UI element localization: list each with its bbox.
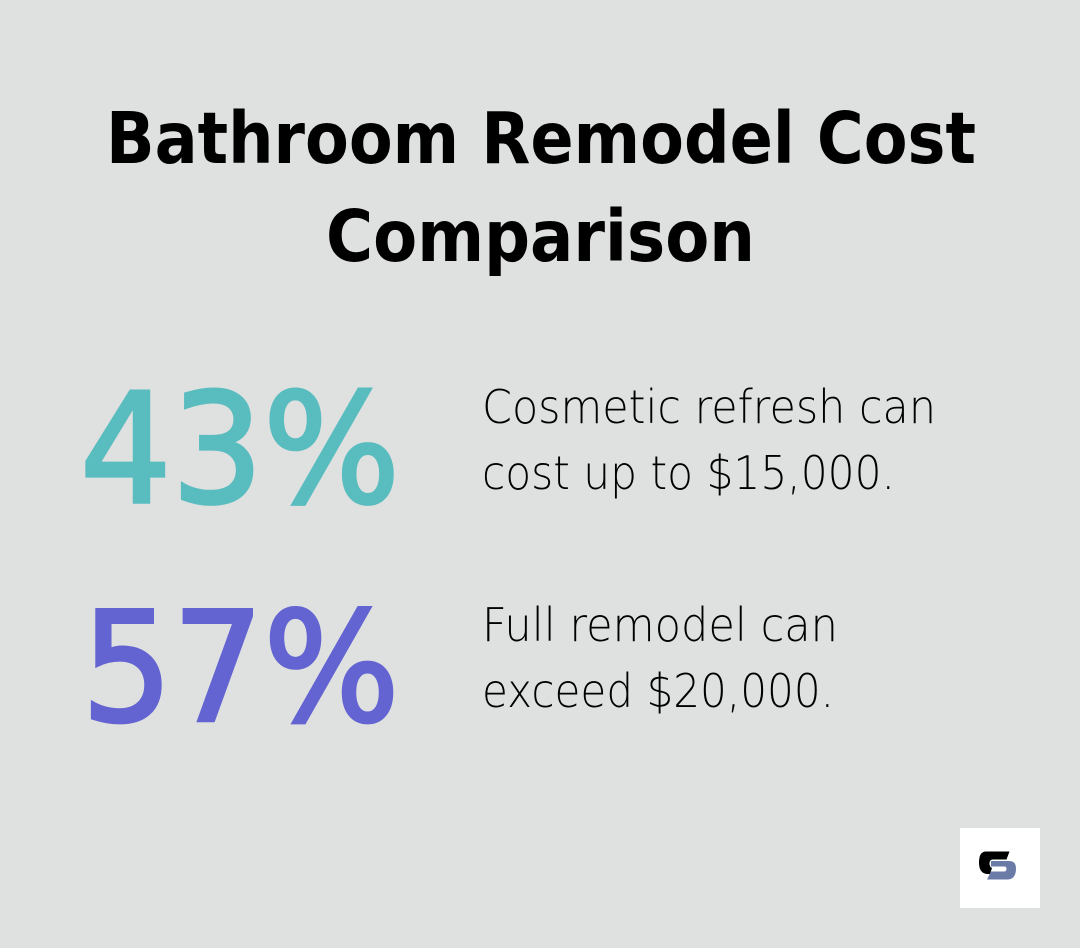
stat row: full remodel [82, 580, 838, 756]
title [106, 97, 976, 278]
description: cosmetic refresh: cost up to $15,000. [482, 446, 895, 500]
stat row: cosmetic refresh [80, 361, 936, 538]
logo mark: S shape [979, 852, 1016, 880]
stat: 57%: 57% [82, 580, 400, 756]
stat: 43%: 43% [80, 361, 400, 538]
logo badge [960, 828, 1040, 908]
description: full remodel: Full remodel can [482, 598, 838, 652]
description: full remodel [482, 598, 838, 718]
description: cosmetic refresh [482, 380, 936, 500]
title: Bathroom Remodel Cost [106, 97, 976, 180]
title: Comparison [326, 195, 755, 278]
description: cosmetic refresh: Cosmetic refresh can [482, 380, 936, 434]
description: full remodel: exceed $20,000. [482, 664, 834, 718]
